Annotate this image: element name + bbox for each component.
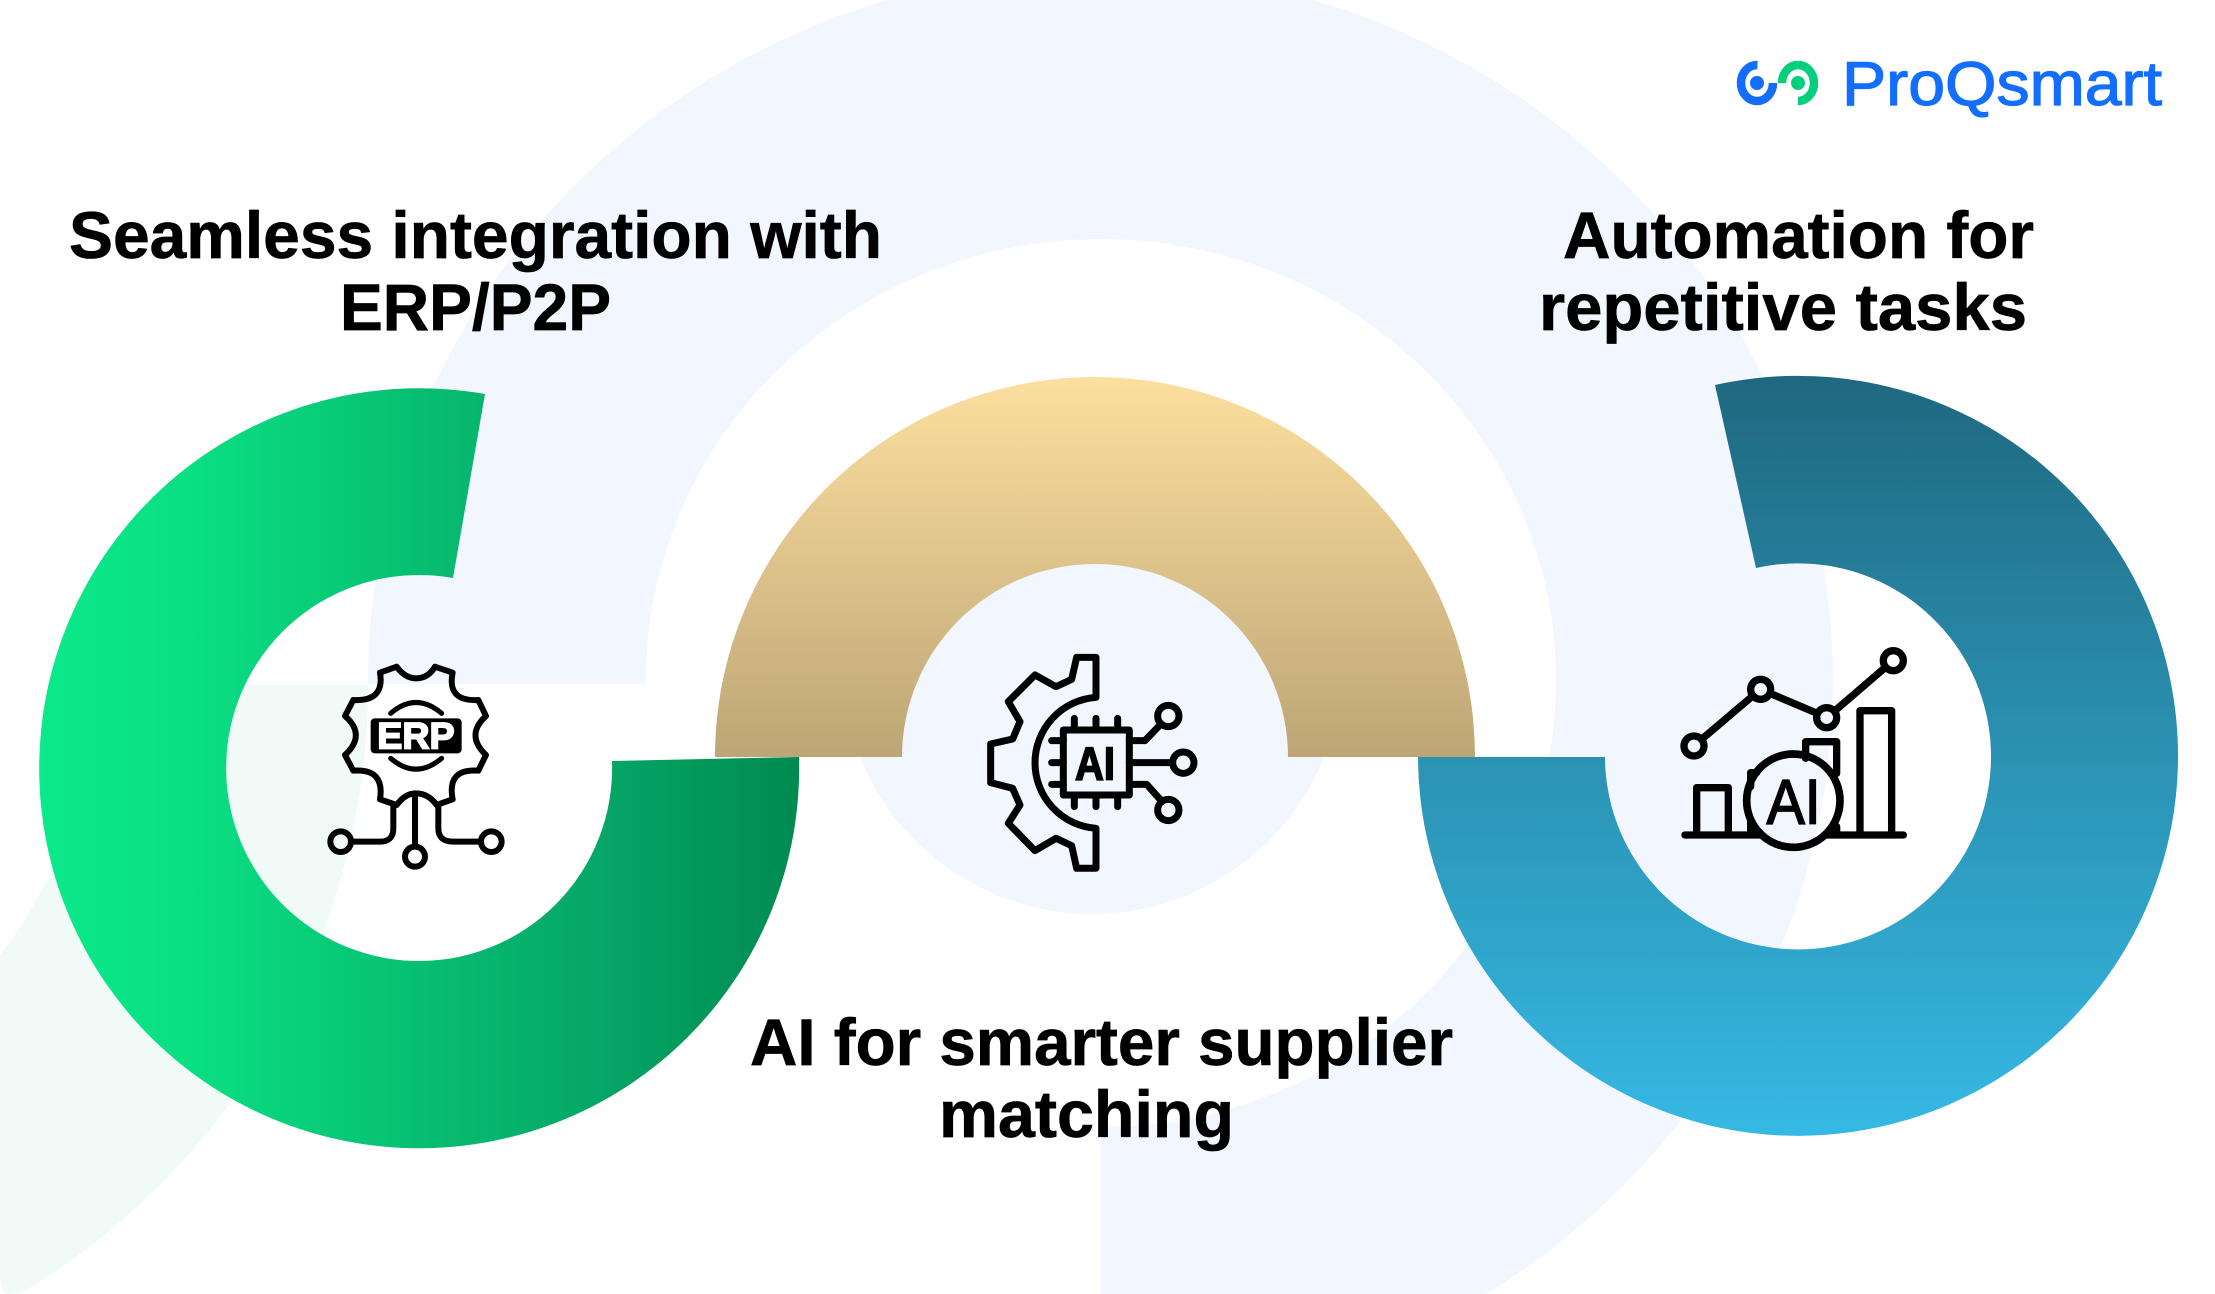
heading: seamless integration: ERP/P2P (340, 270, 611, 344)
heading: automation: repetitive tasks (1539, 270, 2027, 344)
logo: ProQsmart (1741, 50, 2162, 119)
logo mark (1741, 65, 1814, 101)
background: pale green ring (0, 685, 368, 1294)
ring segment: gold (715, 377, 1475, 757)
icon: AI chart (1684, 651, 1903, 847)
ring segment: green (39, 388, 799, 1148)
icon: AI gear with chip: AI (1075, 737, 1115, 789)
heading: AI supplier matching (750, 1005, 1453, 1151)
heading: automation (1539, 198, 2034, 344)
heading: AI supplier matching: AI for smarter supplier (750, 1005, 1453, 1079)
background: pale blue ring (368, 0, 1833, 1294)
icon: ERP gear (330, 667, 502, 867)
heading: seamless integration (69, 198, 882, 344)
heading: AI supplier matching: matching (939, 1077, 1234, 1151)
logo wordmark: ProQsmart (1842, 50, 2162, 119)
heading: automation: Automation for (1563, 198, 2034, 272)
icon: ERP gear: ERP (377, 714, 455, 756)
icon: AI gear with chip (991, 657, 1194, 868)
heading: seamless integration: Seamless integration with (69, 198, 882, 272)
ring segment: blue (1418, 376, 2178, 1136)
icon: AI chart: AI (1767, 767, 1821, 837)
background: pale blue centre circle (842, 414, 1342, 914)
